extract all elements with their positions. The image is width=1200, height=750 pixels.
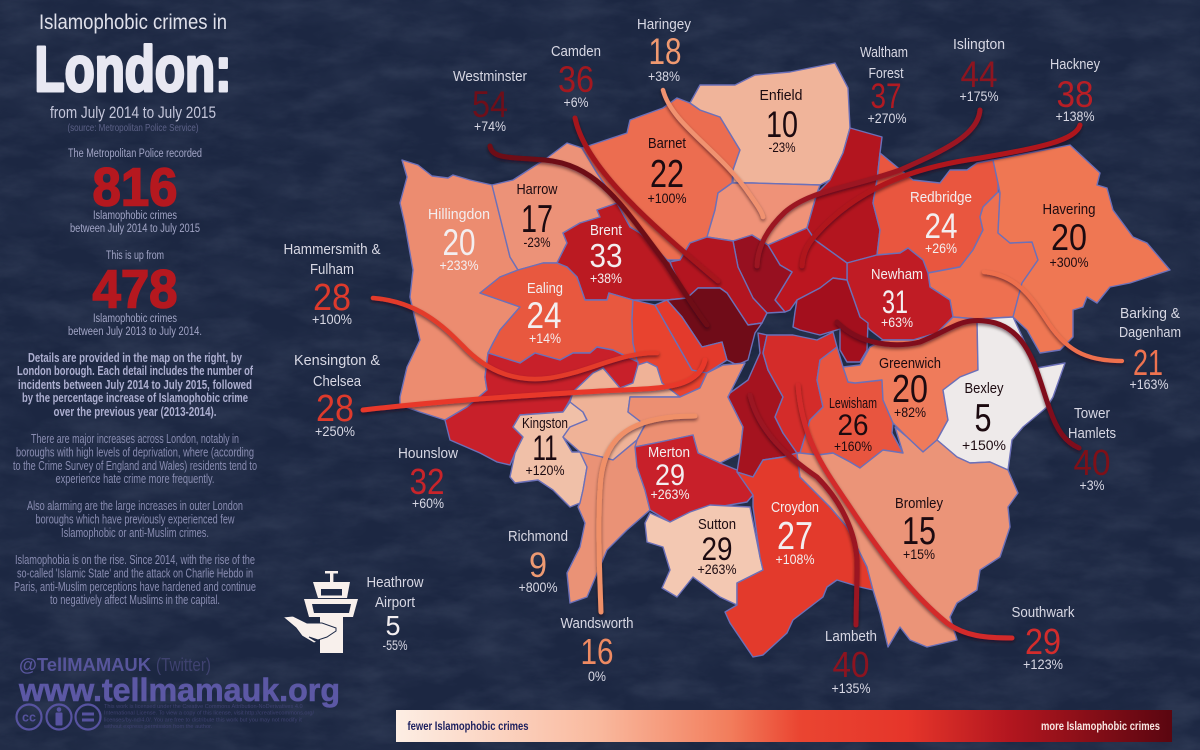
callout: Southwark [1012, 605, 1075, 672]
stat: 816 crimes: Islamophobic crimes [93, 210, 177, 222]
label: Croydon: 27 [777, 515, 813, 558]
callout: Haringey: +38% [648, 69, 680, 84]
label: Enfield [760, 88, 802, 155]
connector: Islington [757, 110, 980, 266]
callout: Hounslow: Hounslow [398, 446, 458, 462]
callout: Barking and Dagenham: Dagenham [1119, 325, 1181, 341]
title block: Islamophobic crimes in [39, 11, 227, 34]
borough: Greenwich [843, 317, 978, 452]
label: Kingston: Kingston [522, 416, 568, 432]
callout: Hammersmith and Fulham: +100% [312, 312, 352, 327]
borough: Islington [733, 235, 792, 313]
label: Lewisham: +160% [834, 439, 872, 454]
callout: Wandsworth: Wandsworth [560, 616, 634, 632]
borough: Lambeth [728, 333, 797, 477]
label: Greenwich: +82% [894, 405, 926, 420]
borough: Wandsworth [628, 363, 745, 463]
footer: social handle and website: www.tellmamauk.org [18, 672, 340, 708]
label: Havering: +300% [1050, 255, 1088, 270]
label: Croydon: Croydon [771, 500, 819, 516]
connector: Camden [575, 118, 718, 281]
callout: Waltham Forest: 37 [870, 77, 902, 116]
label: Enfield: 10 [766, 104, 798, 145]
title block: (source: Metropolitan Police Service) [68, 122, 198, 134]
connector: Hackney [802, 125, 1080, 266]
stat: 478 crimes: Islamophobic crimes [93, 313, 177, 325]
callout: Hammersmith and Fulham: Fulham [310, 262, 354, 278]
borough: Westminster [667, 288, 762, 365]
callout: Wandsworth: 0% [588, 669, 606, 684]
explanation text: major increases: experience hate crime more frequently. [56, 472, 214, 486]
label: Enfield: -23% [768, 140, 796, 155]
label: Brent [590, 223, 622, 286]
callout: Hounslow [398, 446, 458, 511]
label: Newham: Newham [871, 267, 923, 283]
label: Sutton: Sutton [698, 517, 736, 533]
callout: Islington: 44 [960, 54, 998, 95]
callout: Barking and Dagenham [1119, 306, 1181, 392]
callout: Richmond [508, 529, 568, 595]
label: Havering [1042, 202, 1096, 270]
callout: Kensington and Chelsea: 28 [316, 388, 354, 430]
callout: Islington [953, 37, 1005, 104]
callout: Tower Hamlets: +3% [1080, 478, 1104, 493]
label: Newham [871, 267, 923, 330]
callout: Heathrow Airport: Airport [375, 595, 415, 611]
explanation text: major increases [13, 432, 257, 486]
borough: Brent [557, 203, 687, 300]
callout: Haringey: 18 [648, 31, 682, 72]
label: Hillingdon: 20 [442, 222, 476, 263]
callout: Islington: Islington [953, 37, 1005, 53]
label: Bexley: +150% [962, 438, 1006, 453]
label: Havering: 20 [1051, 217, 1087, 258]
footer: social handle and website: (Twitter) [156, 655, 211, 675]
label: Bexley: Bexley [964, 381, 1004, 397]
label: Redbridge: 24 [924, 207, 958, 246]
stat: 478 crimes: between July 2013 to July 2014. [68, 326, 202, 338]
label: Newham: +63% [881, 315, 913, 330]
label: Newham: 31 [882, 284, 908, 320]
licence text: without express permission from the author. [103, 724, 213, 730]
legend gradient bar: more Islamophobic crimes [1041, 721, 1160, 733]
explanation text: on the rise: to negatively affect Muslims in the capital. [50, 593, 220, 607]
label: Croydon [771, 500, 819, 567]
callout: Westminster [453, 69, 527, 134]
explanation text: outer London: Islamophobic or anti-Muslim crimes. [61, 526, 209, 540]
callout: Waltham Forest: Forest [868, 66, 904, 82]
callout: Tower Hamlets: 40 [1074, 442, 1110, 483]
borough: Richmond [563, 362, 680, 460]
callout: Lambeth: +135% [832, 681, 870, 696]
label: Bromley: 15 [902, 510, 936, 553]
borough: Hillingdon [400, 160, 520, 420]
legend gradient bar [396, 710, 1172, 742]
callout: Haringey [637, 17, 692, 84]
label: Bromley: Bromley [895, 496, 944, 512]
callout: Westminster: +74% [474, 119, 506, 134]
label: Barnet: +100% [648, 191, 686, 206]
explanation text: details: Details are provided in the map on the right, by [28, 351, 242, 365]
legend gradient bar: fewer Islamophobic crimes [408, 721, 528, 733]
explanation text: on the rise [14, 553, 256, 607]
callout: Tower Hamlets [1068, 406, 1116, 493]
callout: Richmond: 9 [529, 546, 547, 585]
callout: Lambeth [825, 629, 877, 696]
callout: Hackney [1050, 57, 1101, 124]
borough: Haringey [707, 183, 820, 245]
explanation text: outer London [27, 499, 243, 540]
label: Barnet: 22 [650, 153, 684, 196]
stat: 478 crimes: 478 [92, 260, 178, 320]
icon: airport control tower and plane [283, 571, 358, 653]
callout: Southwark: +123% [1023, 657, 1063, 672]
map of London boroughs [400, 63, 1170, 657]
borough: Bexley [937, 317, 1065, 470]
borough: Hounslow [445, 347, 638, 465]
stat: 816 crimes: between July 2014 to July 2015 [70, 223, 200, 235]
borough: Camden [670, 237, 767, 325]
callout: Hackney: 38 [1056, 74, 1094, 115]
callout: Haringey: Haringey [637, 17, 692, 33]
label: Hillingdon: Hillingdon [428, 207, 490, 223]
explanation text: details: incidents between July 2014 to July 2015, followed [18, 378, 252, 392]
label: Redbridge: +26% [925, 241, 957, 256]
borough: Waltham Forest [807, 128, 882, 263]
label: Kingston [522, 416, 568, 478]
callout: Lambeth: Lambeth [825, 629, 877, 645]
connector: Hammersmith and Fulham [373, 298, 657, 379]
callout: Heathrow Airport: -55% [382, 638, 408, 653]
callout: Camden: +6% [564, 95, 588, 110]
callout: Waltham Forest: Waltham [860, 45, 908, 61]
label: Ealing: Ealing [527, 281, 563, 297]
borough: Newham [847, 248, 953, 340]
callout: Heathrow Airport: Heathrow [366, 575, 424, 591]
borough: Southwark [763, 332, 837, 453]
callout: Westminster: Westminster [453, 69, 527, 85]
callout: Hounslow: +60% [412, 496, 444, 511]
label: Bromley [895, 496, 944, 562]
title block: London: [34, 33, 232, 105]
explanation text: details: London borough. Each detail includes the number of [17, 364, 254, 378]
callout: Hackney: +138% [1056, 109, 1094, 124]
callout: Hounslow: 32 [410, 461, 444, 502]
label: Harrow: 17 [521, 198, 553, 241]
callout: Kensington and Chelsea [294, 353, 380, 439]
title block [34, 11, 232, 134]
label: Bexley: 5 [974, 397, 992, 440]
callout: Islington: +175% [960, 89, 998, 104]
label: Enfield: Enfield [760, 88, 802, 104]
connector: Lambeth [750, 395, 857, 625]
connector: Tower Hamlets [837, 321, 1079, 448]
label: Merton: Merton [648, 445, 690, 461]
label: Sutton [698, 517, 736, 577]
connector: Haringey [663, 90, 763, 217]
callout: Barking and Dagenham: 21 [1133, 342, 1163, 383]
borough: Sutton [645, 505, 763, 605]
licence text: International License. To view a copy of this license, visit http://creativecommons.org/ [104, 711, 315, 717]
stat: 478 crimes [68, 250, 202, 338]
label: Greenwich: Greenwich [879, 356, 941, 372]
label: Harrow [516, 182, 558, 250]
connector: Southwark [798, 385, 1012, 638]
label: Hillingdon: +233% [440, 258, 478, 273]
borough: Lewisham [800, 347, 903, 468]
label: Brent: 33 [590, 237, 622, 274]
borough: Havering [993, 145, 1170, 353]
callout: Wandsworth: 16 [580, 631, 614, 672]
borough: Richmond lower strip [567, 440, 650, 603]
explanation text: details: by the percentage increase of Islamophobic crime [22, 391, 248, 405]
footer: social handle and website: @TellMAMAUK [19, 655, 151, 675]
borough: Ealing [480, 263, 638, 363]
callout: Richmond: Richmond [508, 529, 568, 545]
callout: Camden [551, 44, 601, 110]
callout: Tower Hamlets: Hamlets [1068, 426, 1116, 442]
callout: Kensington and Chelsea: Kensington & [294, 353, 380, 369]
label: Kingston: 11 [532, 429, 558, 468]
title block: from July 2014 to July 2015 [50, 103, 216, 122]
connector: Wandsworth [599, 416, 695, 612]
label: Harrow: -23% [524, 235, 550, 250]
stat: 816 crimes [68, 148, 202, 235]
label: Merton [648, 445, 690, 502]
connector: Barking and Dagenham [984, 272, 1122, 361]
explanation text: details [17, 351, 254, 419]
footer: social handle and website [18, 655, 340, 708]
label: Croydon: +108% [776, 552, 814, 567]
stat: 816 crimes: The Metropolitan Police recorded [68, 148, 202, 160]
connector lines from labels to boroughs [363, 90, 1122, 638]
label: Sutton: +263% [698, 562, 736, 577]
label: Ealing: 24 [526, 295, 562, 336]
borough: Barking and Dagenham [928, 192, 1038, 319]
label: Lewisham: Lewisham [829, 396, 877, 412]
label: Hillingdon [428, 207, 490, 273]
label: Brent: Brent [590, 223, 622, 239]
label: Havering: Havering [1042, 202, 1096, 218]
callout: Heathrow Airport: 5 [386, 610, 400, 641]
callout: Richmond: +800% [518, 580, 558, 595]
borough: Hammersmith and Fulham [632, 300, 707, 397]
borough: Kingston [510, 402, 587, 507]
licence text [103, 704, 315, 730]
explanation text: major increases: to the Crime Survey of England and Wales) residents tend to [13, 459, 257, 473]
label: Merton: +263% [650, 487, 690, 502]
callout: Camden: Camden [551, 44, 601, 60]
callout: Heathrow Airport [366, 575, 424, 653]
explanation text: on the rise: Paris, anti-Muslim perceptions have hardened and continue [14, 580, 256, 594]
label: Kingston: +120% [526, 463, 564, 478]
callout: Kensington and Chelsea: Chelsea [313, 374, 362, 390]
borough: Enfield [690, 63, 850, 185]
explanation text: details: over the previous year (2013-2014). [54, 405, 216, 419]
callout: Southwark: Southwark [1012, 605, 1075, 621]
callout: Hammersmith and Fulham [284, 242, 381, 327]
callout: Westminster: 54 [472, 84, 508, 125]
label: Redbridge: Redbridge [910, 190, 972, 206]
label: Redbridge [910, 190, 972, 256]
callout: Hackney: Hackney [1050, 57, 1101, 73]
borough: Hackney [768, 228, 847, 312]
label: Sutton: 29 [702, 531, 732, 567]
callout: Wandsworth [560, 616, 634, 684]
borough: Redbridge [873, 153, 998, 273]
explanation text: major increases: boroughs with high levels of deprivation, where (according [16, 446, 254, 460]
label: Harrow: Harrow [516, 182, 558, 198]
label: Lewisham: 26 [838, 409, 868, 442]
borough: Croydon [725, 453, 873, 657]
callout: Waltham Forest [860, 45, 908, 126]
callout: Waltham Forest: +270% [868, 111, 906, 126]
label: Barnet: Barnet [648, 136, 686, 152]
explanation text: outer London: Also alarming are the large increases in outer London [27, 499, 243, 513]
label: Bexley [962, 381, 1006, 453]
label: Ealing: +14% [529, 331, 561, 346]
callout: Barking and Dagenham: +163% [1130, 377, 1168, 392]
callout: Hammersmith and Fulham: Hammersmith & [284, 242, 381, 258]
borough: Kensington and Chelsea [655, 300, 727, 373]
label: Bromley: +15% [903, 547, 935, 562]
stat: 816 crimes: 816 [92, 158, 178, 218]
label: Ealing [526, 281, 563, 346]
label: Lewisham [829, 396, 877, 454]
callout: Tower Hamlets: Tower [1074, 406, 1110, 422]
label: Barnet [648, 136, 686, 206]
borough: Merton [635, 435, 753, 522]
callout: Kensington and Chelsea: +250% [315, 424, 355, 439]
borough: Bromley [797, 427, 1018, 647]
stat: 478 crimes: This is up from [106, 250, 164, 262]
borough: Barnet [582, 98, 740, 260]
icon: creative commons badges: cc [22, 710, 36, 724]
licence text: licenses/by-nd/4.0/. You are free to distribute this work but you may not modify it [104, 717, 302, 723]
label: Greenwich: 20 [892, 368, 928, 411]
callout: Hammersmith and Fulham: 28 [313, 277, 351, 319]
callout: Camden: 36 [558, 59, 594, 100]
callout: Barking and Dagenham: Barking & [1120, 306, 1180, 322]
callout: Southwark: 29 [1025, 621, 1061, 662]
explanation text: on the rise: so-called 'Islamic State' and the attack on Charlie Hebdo in [17, 566, 253, 580]
borough: Tower Hamlets [793, 278, 868, 362]
explanation text: major increases: There are major increases across London, notably in [31, 432, 239, 446]
icon: creative commons badges [16, 704, 100, 730]
explanation text: outer London: boroughs which have previously experienced few [36, 512, 235, 526]
label: Greenwich [879, 356, 941, 420]
callout: Lambeth: 40 [832, 644, 870, 685]
label: Brent: +38% [590, 271, 622, 286]
label: Merton: 29 [655, 459, 685, 492]
connector: Kensington and Chelsea [363, 360, 705, 410]
explanation text: on the rise: Islamophobia is on the rise. Since 2014, with the rise of the [15, 553, 255, 567]
connector: Westminster [490, 146, 707, 325]
borough: Harrow [492, 143, 617, 270]
licence text: This work is licensed under the Creative Commons Attribution-NoDerivatives 4.0 [104, 704, 303, 710]
